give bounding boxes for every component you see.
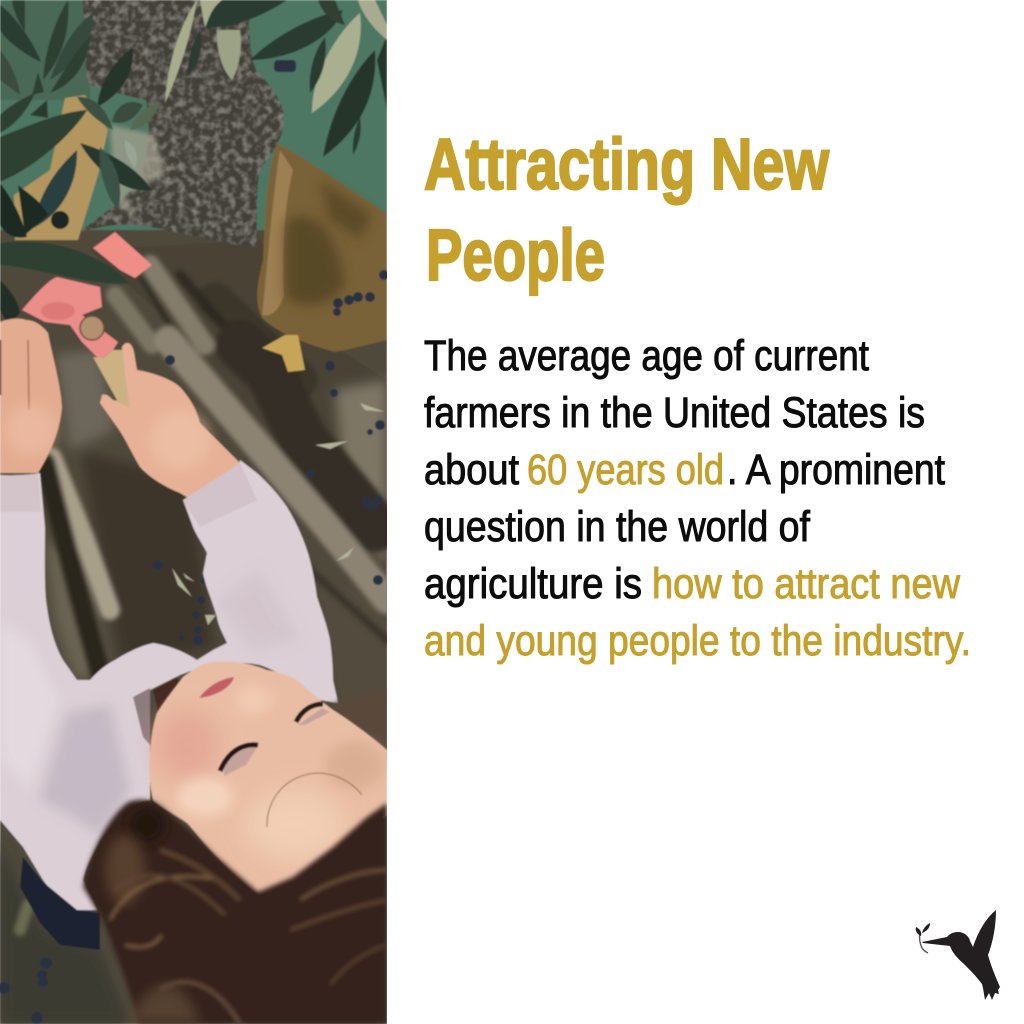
body paragraph: The average age of current [424, 332, 869, 380]
body paragraph: agriculture is [424, 560, 642, 608]
hair behind face [333, 690, 387, 760]
grass [0, 0, 387, 240]
pink toy [22, 232, 152, 360]
body paragraph: question in the world of [424, 503, 811, 551]
mouth [199, 677, 234, 698]
title: People [426, 216, 605, 296]
burlap bag [257, 143, 387, 372]
icon: hummingbird logo with olive sprig [916, 910, 1000, 1000]
body paragraph: farmers in the United States is [424, 389, 925, 437]
hair curl [267, 773, 362, 827]
face [149, 662, 387, 895]
hair [83, 800, 387, 1024]
collar shadow [153, 678, 180, 712]
wooden handle [93, 350, 130, 408]
jeans [20, 857, 100, 950]
pale bark patch [110, 125, 165, 215]
photo: child reaching into olive tree [0, 0, 389, 1024]
right hand [100, 343, 240, 507]
paper behind leaves [14, 95, 108, 240]
sweater [0, 460, 338, 910]
title [424, 125, 830, 296]
title: Attracting New [424, 125, 830, 205]
body paragraph: 60 years old [527, 446, 724, 494]
body paragraph: . A prominent [727, 446, 945, 494]
scattered olives [0, 60, 389, 1024]
fallen leaves [172, 403, 385, 625]
body paragraph: about [424, 446, 519, 494]
body paragraph [424, 332, 971, 665]
olive leaves [0, 0, 387, 325]
body paragraph: how to attract new [652, 560, 961, 608]
tree trunk [80, 0, 284, 247]
eyes [224, 746, 258, 776]
tarp with folds [0, 230, 387, 1024]
left hand [0, 319, 62, 473]
